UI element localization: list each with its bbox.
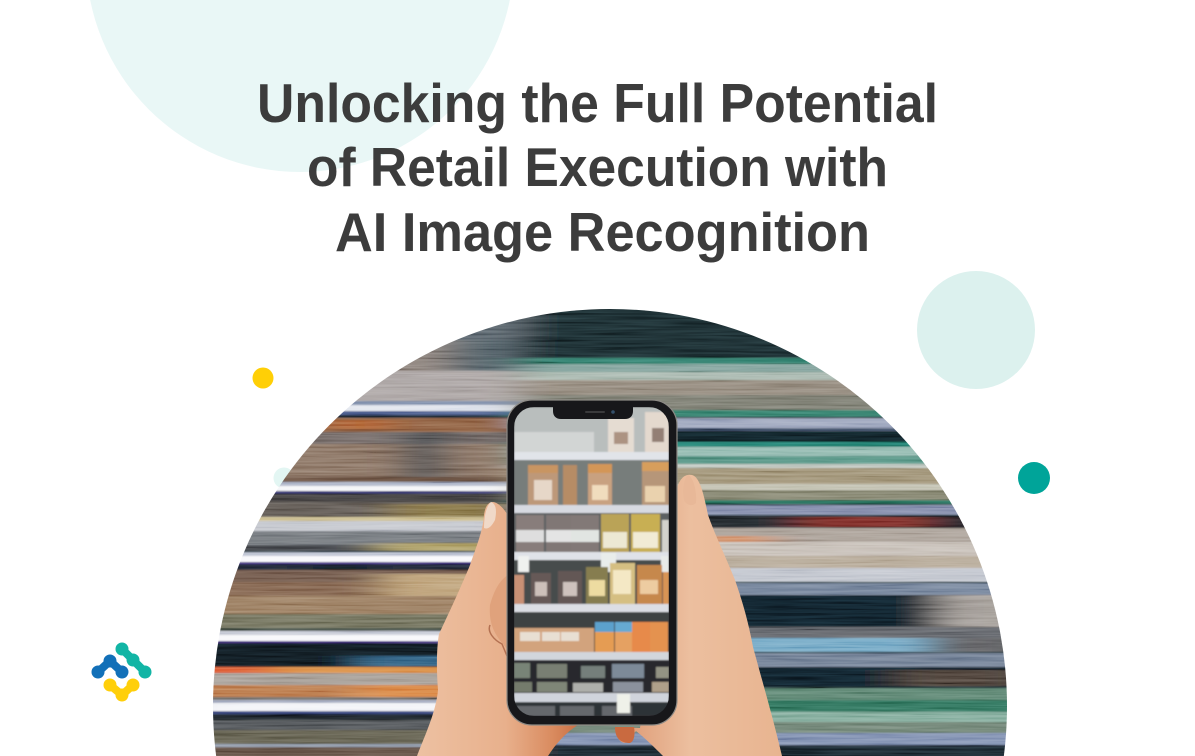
products row 4 [514,628,594,652]
pale dot behind photo [274,468,294,488]
logo blue stroke [95,658,125,675]
title: Unlocking the Full Potential [257,72,938,134]
yellow dot [252,368,274,388]
thumb nail left [484,502,496,529]
products row 2 [516,515,544,552]
products row 3 [514,575,524,604]
thumb nail right [683,475,696,505]
fold between palm and finger [489,625,507,656]
logo [95,646,148,698]
products row 1 [527,472,559,506]
decorative circle right [917,271,1035,389]
icon: right hand [615,475,782,756]
price tag [617,694,630,713]
icon: smartphone showing store shelf [507,400,677,725]
photo: blurred supermarket shelves in half circle [213,309,1007,756]
logo yellow stroke [107,682,136,698]
shelf tags [518,556,529,572]
phone body [507,400,677,725]
logo teal stroke [119,646,148,675]
phone notch [553,406,633,419]
notch speaker and camera [585,411,605,413]
products row 5 [514,663,530,678]
icon: left hand [417,502,578,756]
teal dot [1018,462,1050,494]
title [257,72,938,263]
finger tip under phone [615,727,635,743]
title: of Retail Execution with [307,136,888,198]
index finger behind phone [490,575,508,650]
phone screen [514,407,669,716]
title: AI Image Recognition [335,201,870,263]
decorative large circle top left [86,0,514,172]
